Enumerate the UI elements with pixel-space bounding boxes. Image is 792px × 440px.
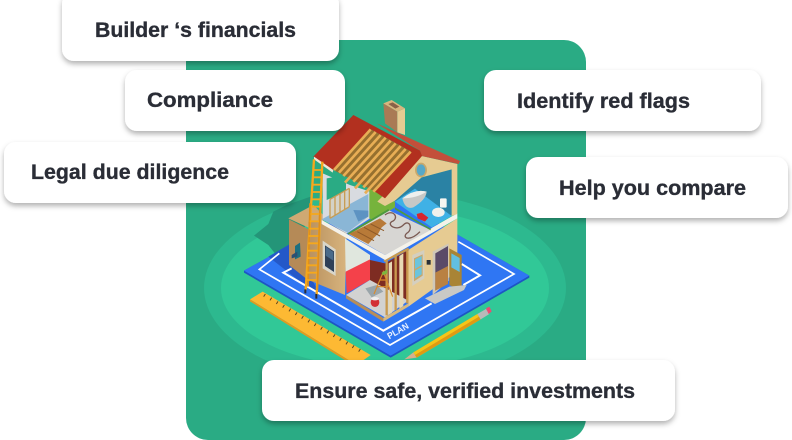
concrete floor <box>347 210 431 255</box>
annex <box>288 205 327 282</box>
card: Builder's financials: Builder ‘s financials <box>95 18 296 42</box>
roof <box>313 115 460 198</box>
side window <box>323 241 336 276</box>
heating pipes <box>385 213 420 238</box>
chimney <box>383 100 405 135</box>
upper floor <box>322 169 453 255</box>
card: Ensure safe, verified investments: Ensure safe, verified investments <box>295 379 635 403</box>
wall opening <box>327 175 346 200</box>
ground floor walls <box>308 218 467 322</box>
left room back wall <box>323 173 370 233</box>
card: Identify red flags: Identify red flags <box>517 89 690 113</box>
paint bucket <box>371 297 379 307</box>
pencil <box>404 307 492 359</box>
blueprint sheet <box>244 193 529 358</box>
toilet <box>432 198 447 217</box>
card: Ensure safe, verified investments <box>262 360 675 421</box>
double window <box>330 188 349 218</box>
ladder <box>305 159 322 299</box>
round window <box>415 163 427 177</box>
plan label: PLAN <box>385 321 411 341</box>
front wall <box>408 218 457 307</box>
left room floor <box>322 194 368 233</box>
card: Help you compare <box>526 157 788 218</box>
card: Identify red flags <box>484 70 761 131</box>
floor slab <box>322 213 457 260</box>
wall studs <box>384 249 409 315</box>
ruler <box>250 292 371 367</box>
illustration: isometric house on blueprint <box>244 100 529 367</box>
doorstep <box>425 285 467 304</box>
cutaway room <box>345 238 370 273</box>
bathroom <box>395 169 453 231</box>
card: Compliance: Compliance <box>147 88 273 112</box>
gaps between wall studs <box>389 261 392 315</box>
bathtub <box>402 191 427 208</box>
card: Compliance <box>125 70 345 131</box>
green wall <box>369 186 395 221</box>
card: Legal due diligence: Legal due diligence <box>31 160 229 184</box>
small ladder <box>374 272 393 297</box>
front window <box>412 250 424 286</box>
card: Help you compare: Help you compare <box>559 176 746 200</box>
house shadow <box>254 197 311 256</box>
gable wall <box>377 156 457 216</box>
wooden floor <box>349 218 387 244</box>
panel: green background <box>186 40 586 440</box>
exposed rafters <box>333 129 411 192</box>
card: Legal due diligence <box>4 142 296 203</box>
front door <box>433 243 449 295</box>
wall lamp <box>427 260 431 265</box>
red toolbox <box>417 213 428 222</box>
card: Builder's financials <box>62 0 339 61</box>
